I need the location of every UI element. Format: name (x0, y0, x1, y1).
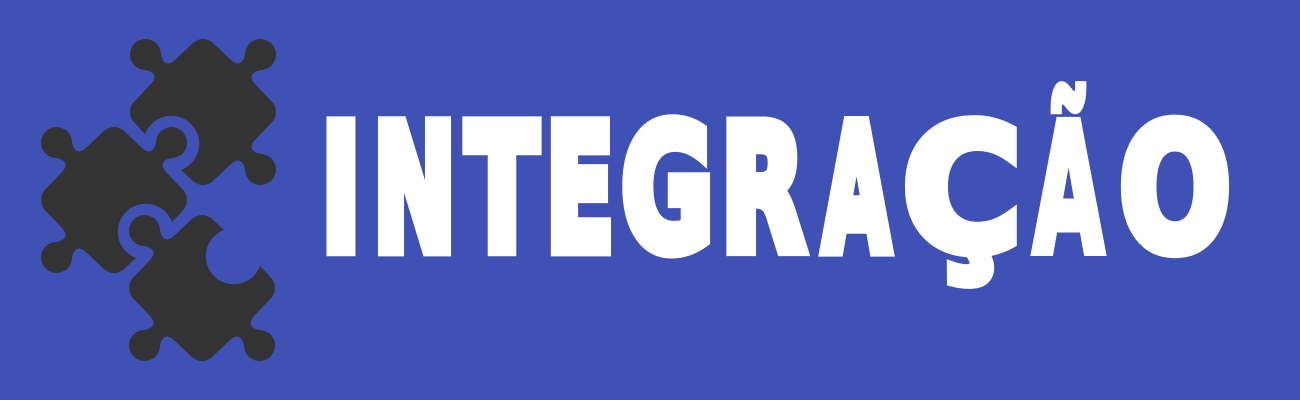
title: INTEGRAÇÃO: E (546, 91, 614, 291)
title: INTEGRAÇÃO: G (621, 90, 714, 290)
title: INTEGRAÇÃO: T (466, 90, 538, 290)
puzzle piece: bottom (129, 215, 275, 361)
title: INTEGRAÇÃO: R (721, 89, 805, 290)
title: INTEGRAÇÃO: I (321, 89, 361, 290)
title: INTEGRAÇÃO (321, 85, 1231, 294)
title: INTEGRAÇÃO: Ç (903, 90, 1021, 290)
title: INTEGRAÇÃO: O (1119, 90, 1231, 291)
title: INTEGRAÇÃO: A (823, 91, 890, 291)
title: INTEGRAÇÃO: N (373, 91, 456, 291)
puzzle piece: top (130, 39, 276, 185)
title: INTEGRAÇÃO: Ã (1034, 85, 1104, 294)
puzzle piece: left (41, 127, 187, 273)
icon: three interlocking puzzle pieces (41, 39, 276, 361)
